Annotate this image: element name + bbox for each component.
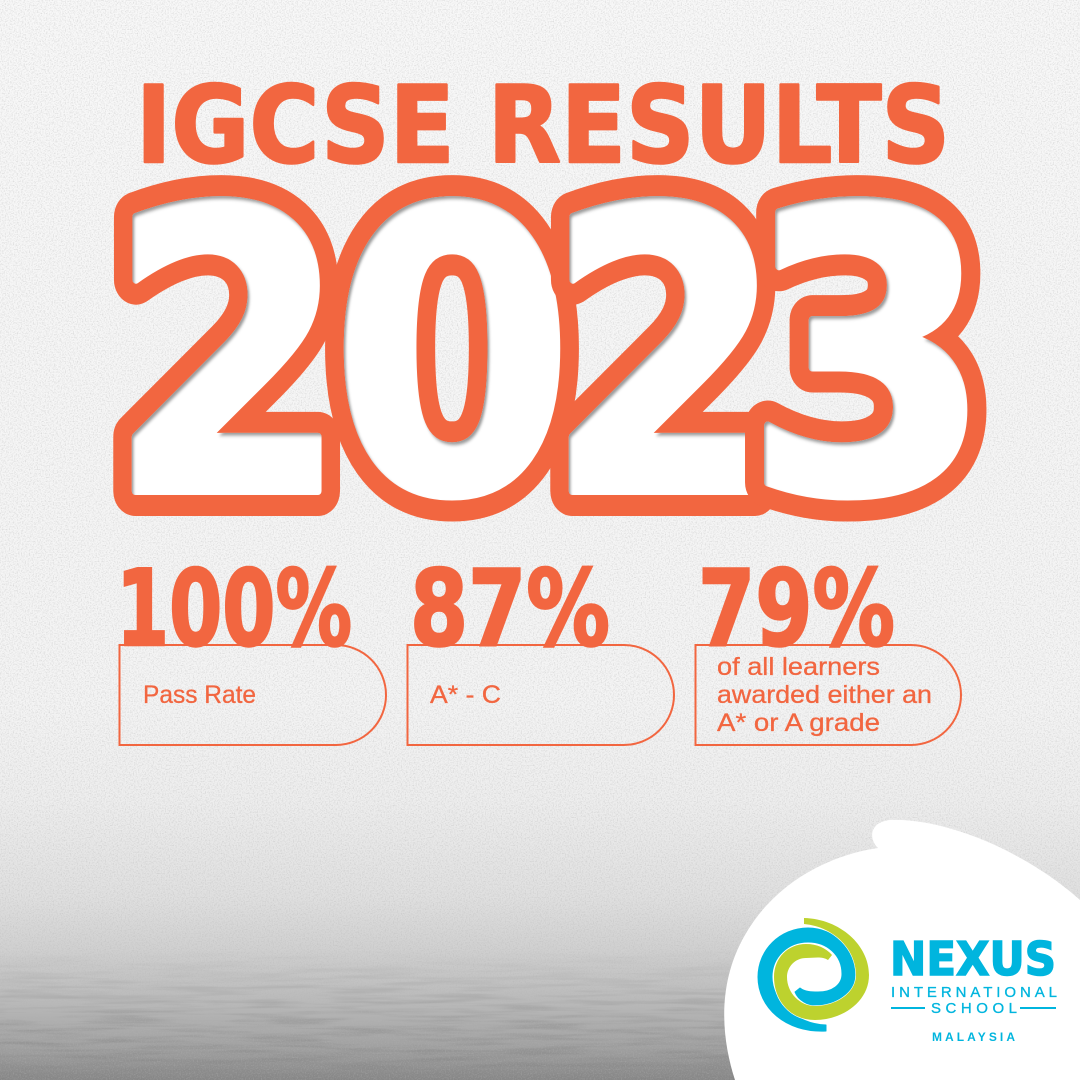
malaysia: MALAYSIA: [932, 1030, 1015, 1044]
stat value 100%: 100%: [116, 548, 352, 670]
digit 2: 2: [108, 128, 348, 584]
white logo blob: [724, 820, 1080, 1080]
digit 3: 3: [744, 128, 992, 584]
stat value 79%: 79%: [698, 548, 895, 670]
digit 0: 0: [331, 128, 573, 584]
stat pill: [408, 645, 674, 745]
logo: [758, 918, 1057, 1044]
stat pill: [120, 645, 386, 745]
digit 2 second: 2: [545, 128, 785, 584]
digit 2: 2: [108, 128, 348, 584]
stat pill: [696, 645, 961, 745]
stat label: [717, 653, 932, 737]
stat label: awarded either an: [717, 681, 932, 709]
icon: spiral mark: [758, 918, 869, 1031]
stat label: A* or A grade: [717, 709, 880, 737]
stat label: A* - C: [430, 681, 501, 709]
stat: 100% pass rate: [116, 548, 386, 745]
digit 0: 0: [331, 128, 573, 584]
stat label: Pass Rate: [143, 681, 256, 709]
stat value 87%: 87%: [410, 548, 610, 670]
school with rules: SCHOOL: [931, 1000, 1017, 1017]
digit 2 second: 2: [545, 128, 785, 584]
digit 3: 3: [744, 128, 992, 584]
stat: 79% A* or A: [696, 548, 961, 745]
title: IGCSE RESULTS: [136, 64, 950, 187]
international: INTERNATIONAL: [891, 984, 1057, 1001]
stat label: of all learners: [717, 653, 880, 681]
wordmark: NEXUS: [890, 932, 1056, 986]
year 2023 outlined numerals: [108, 128, 992, 584]
stat: 87% A*-C: [408, 548, 674, 745]
